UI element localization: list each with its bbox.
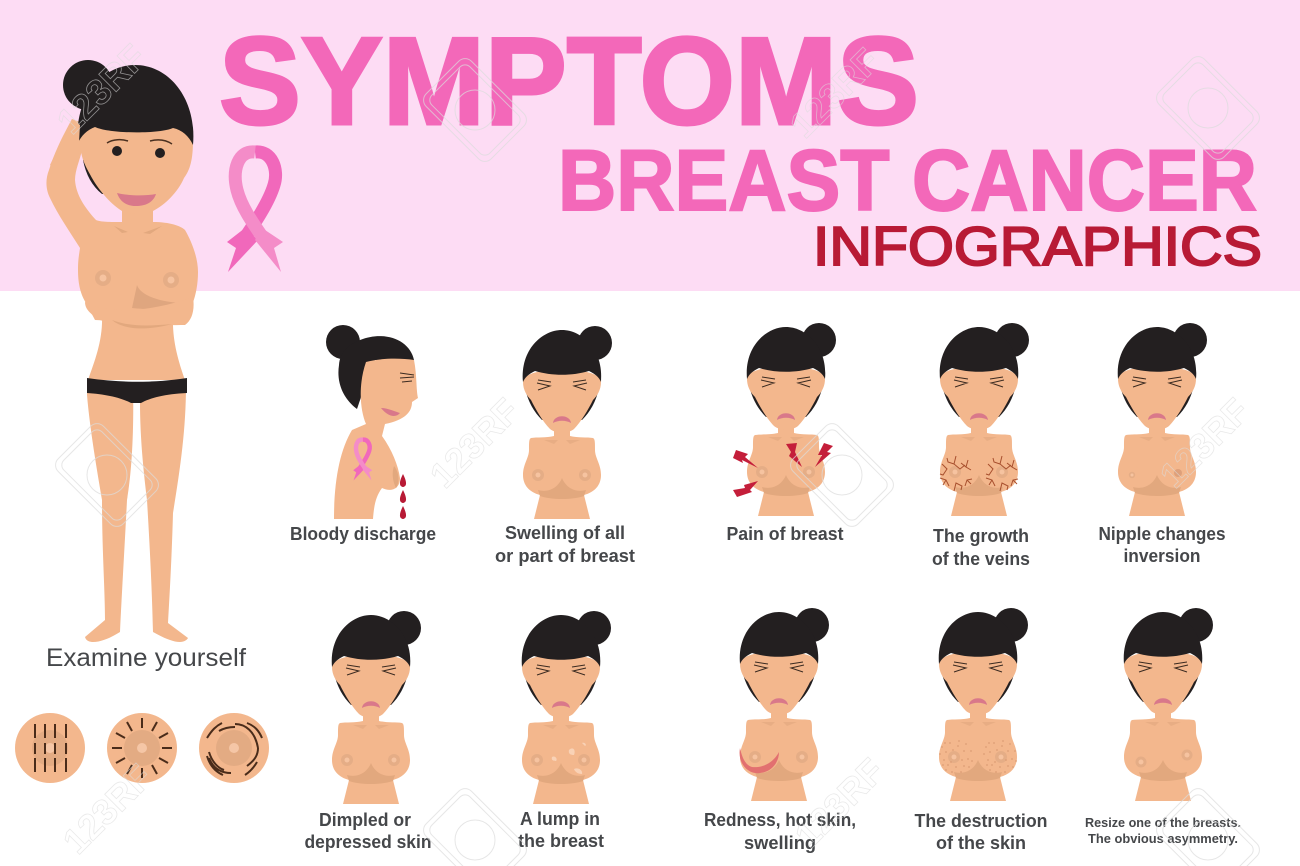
symptom: redness figure	[740, 608, 829, 801]
label: Bloody discharge: Bloody discharge	[290, 524, 436, 544]
title: INFOGRAPHICS: INFOGRAPHICS	[813, 215, 1262, 277]
label: Redness, hot skin, swelling: swelling	[744, 833, 816, 853]
icon: vertical strip exam	[15, 713, 85, 783]
label: Dimpled or depressed skin: depressed skin	[304, 832, 432, 852]
large woman examining herself	[46, 60, 198, 642]
label: Swelling of all or part of breast: or part of breast	[495, 546, 635, 566]
symptom: growth of veins figure	[940, 323, 1029, 516]
label: Redness, hot skin, swelling	[704, 810, 856, 853]
label: Dimpled or depressed skin: Dimpled or	[319, 810, 411, 830]
watermarks: 123RF	[49, 36, 154, 142]
watermarks: 123RF	[1152, 390, 1257, 496]
symptom: pain of breast figure	[733, 323, 836, 516]
label: The growth of the veins: The growth	[933, 526, 1029, 546]
label: Dimpled or depressed skin	[304, 810, 432, 852]
label: The destruction of the skin: of the skin	[936, 833, 1026, 853]
symptom: lump figure	[522, 611, 611, 804]
symptom: bloody discharge figure	[326, 325, 418, 519]
title: SYMPTOMS: SYMPTOMS	[219, 13, 919, 151]
label: Examine yourself: Examine yourself	[46, 644, 246, 672]
label: Swelling of all or part of breast	[495, 523, 635, 566]
label: Nipple changes inversion: inversion	[1124, 546, 1200, 566]
title: BREAST CANCER: BREAST CANCER	[558, 133, 1257, 229]
watermarks: 123RF	[55, 756, 160, 862]
header band	[0, 0, 1300, 291]
label: Swelling of all or part of breast: Swelling of all	[505, 523, 625, 543]
icon: radial exam	[107, 713, 177, 783]
label: The growth of the veins	[932, 526, 1030, 569]
symptom: nipple changes figure	[1118, 323, 1207, 516]
label: A lump in the breast: the breast	[518, 831, 604, 851]
symptom: destruction of skin figure	[939, 608, 1028, 801]
label: Pain of breast: Pain of breast	[726, 524, 844, 544]
watermarks: 123RF	[787, 750, 892, 856]
label: Redness, hot skin, swelling: Redness, hot skin,	[704, 810, 856, 830]
symptom: resized breast figure	[1124, 608, 1213, 801]
label: Nipple changes inversion: Nipple changes	[1098, 524, 1226, 544]
label: Resize one of the breasts	[1085, 816, 1241, 846]
label: Nipple changes inversion	[1098, 524, 1226, 566]
symptom: swelling figure	[523, 326, 612, 519]
watermarks: 123RF	[422, 390, 527, 496]
icon: pink ribbon	[227, 152, 283, 272]
label: The destruction of the skin	[914, 811, 1048, 853]
label: Resize one of the breasts: The obvious asymmetry.	[1088, 832, 1238, 846]
watermarks: 123RF	[782, 40, 887, 146]
label: The destruction of the skin: The destruction	[914, 811, 1048, 831]
icon: circular exam	[199, 713, 269, 783]
symptom: dimpled skin figure	[332, 611, 421, 804]
label: Resize one of the breasts: Resize one of the breasts.	[1085, 816, 1241, 830]
label: The growth of the veins: of the veins	[932, 549, 1030, 569]
label: A lump in the breast: A lump in	[520, 809, 600, 829]
label: A lump in the breast	[518, 809, 604, 851]
